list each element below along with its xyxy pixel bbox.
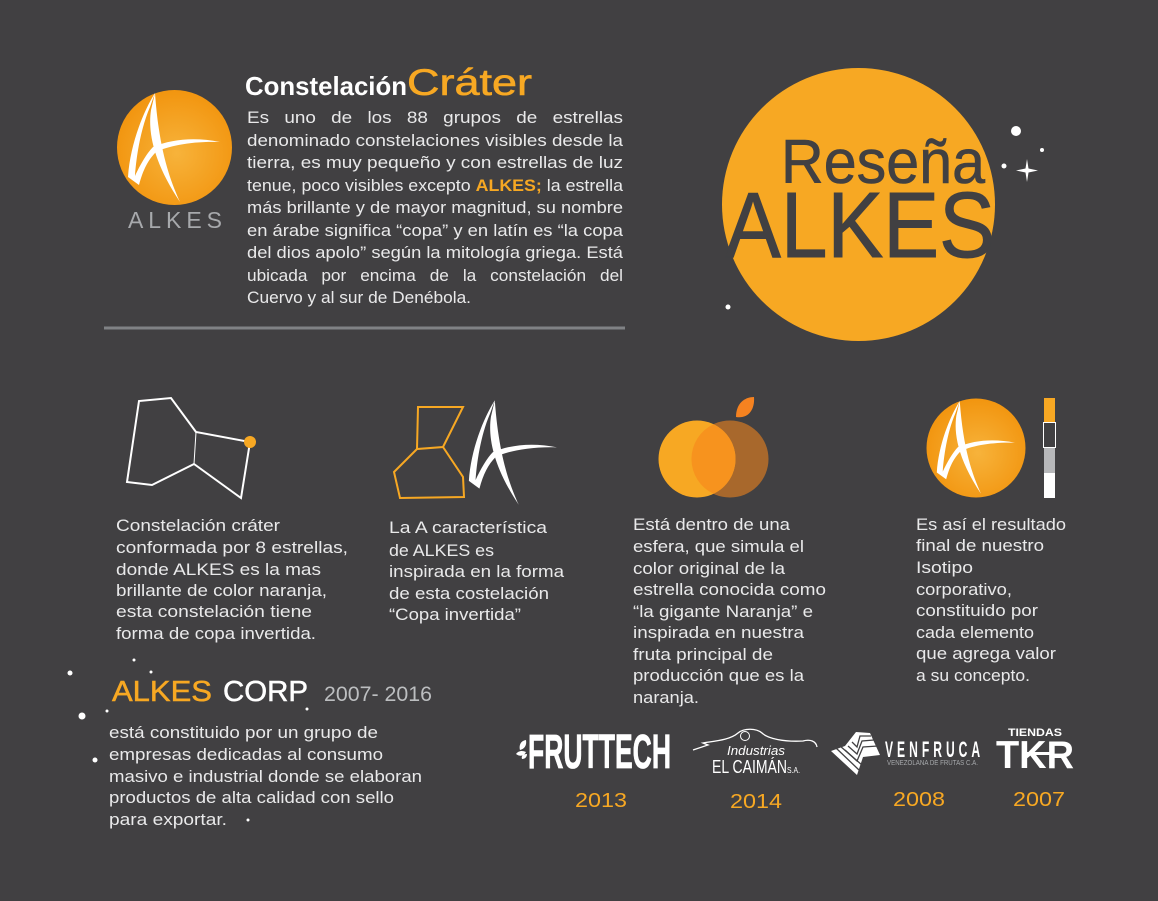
text block: constellation description: Constelación cráter — [116, 516, 280, 535]
text block: constellation description: conformada por 8 estrellas, — [116, 538, 348, 557]
text block: constellation description: donde ALKES es la mas — [116, 560, 321, 579]
text block: intro paragraph: en árabe significa “copa” y en latín es “la copa — [247, 221, 624, 240]
text block: intro paragraph: tenue, poco visibles excepto ALKES; la estrella — [247, 176, 624, 195]
text block: isotipo description: Isotipo — [916, 558, 973, 577]
title: Reseña ALKES on orange circle — [722, 68, 995, 341]
icon: final isotipo — [926, 398, 1026, 498]
icon: orange fruit circles — [658, 397, 768, 498]
text block: sphere description: fruta principal de — [633, 645, 773, 664]
text block: ALKES CORP description: empresas dedicadas al consumo — [109, 745, 383, 764]
text block: ALKES CORP description: masivo e industrial donde se elaboran — [109, 767, 422, 786]
logo: Venfruca 2008: VENFRUCA — [885, 737, 980, 762]
text block: intro paragraph: denominado constelaciones visibles desde la — [247, 131, 624, 150]
text block: ALKES CORP description: productos de alta calidad con sello — [109, 788, 394, 807]
text block: isotipo description: cada elemento — [916, 623, 1034, 642]
logo: ALKES isotipo — [117, 90, 232, 233]
text block: intro paragraph: Es uno de los 88 grupos de estrellas — [247, 108, 623, 127]
text block: constellation description: brillante de color naranja, — [116, 581, 327, 600]
text block: letter A description: La A característica — [389, 518, 548, 537]
text block: sphere description: producción que es la — [633, 666, 805, 685]
logo: Venfruca 2008: 2008 — [893, 789, 945, 811]
logo: Venfruca 2008: VENEZOLANA DE FRUTAS C.A. — [887, 760, 978, 767]
text block: letter A description: de ALKES es — [389, 541, 494, 560]
text block: isotipo description: que agrega valor — [916, 644, 1056, 663]
logo: Tiendas TKR 2007: TIENDAS — [1008, 727, 1062, 739]
heading: ALKES CORP 2007-2016: 2007- 2016 — [324, 683, 432, 706]
text block: isotipo description: corporativo, — [916, 580, 1012, 599]
text block: isotipo description: constituido por — [916, 601, 1038, 620]
logo: Industrias El Caimán 2014 — [693, 729, 817, 813]
text block: ALKES CORP description — [109, 723, 422, 829]
text block: constellation description: forma de copa invertida. — [116, 624, 316, 643]
text block: intro paragraph — [247, 108, 624, 307]
logo: Tiendas TKR 2007: 2007 — [1013, 789, 1065, 811]
heading: ALKES CORP 2007-2016: CORP — [223, 676, 308, 708]
logo: Venfruca 2008 — [831, 732, 980, 811]
logo: Industrias El Caimán 2014: EL CAIMÁN — [712, 757, 787, 777]
logo: Frutech 2013 — [516, 726, 671, 812]
text block: sphere description: estrella conocida como — [633, 580, 826, 599]
heading: ALKES CORP 2007-2016 — [112, 676, 432, 708]
title: Reseña ALKES on orange circle: ALKES — [725, 173, 995, 277]
text block: isotipo description — [916, 515, 1066, 685]
text block: isotipo description: a su concepto. — [916, 666, 1030, 685]
text block: sphere description: Está dentro de una — [633, 515, 791, 534]
text block: isotipo description: Es así el resultado — [916, 515, 1066, 534]
heading: Constelación Cráter: Constelación — [245, 71, 407, 101]
text block: letter A description: inspirada en la forma — [389, 562, 565, 581]
logo: Tiendas TKR 2007: TKR — [996, 734, 1074, 777]
heading: ALKES CORP 2007-2016: ALKES — [112, 676, 212, 708]
text block: isotipo description: final de nuestro — [916, 536, 1044, 555]
text block: intro paragraph: del dios apolo” según la mitología griega. Está — [247, 243, 624, 262]
logo: Industrias El Caimán 2014: 2014 — [730, 791, 782, 813]
text block: sphere description: color original de la — [633, 559, 786, 578]
text block: letter A description: “Copa invertida” — [389, 605, 521, 624]
text block: intro paragraph: Cuervo y al sur de Denébola. — [247, 288, 471, 307]
text block: intro paragraph: tierra, es muy pequeño y con estrellas de luz — [247, 153, 623, 172]
logo: Industrias El Caimán 2014: S.A. — [787, 766, 800, 775]
text block: sphere description: esfera, que simula el — [633, 537, 804, 556]
text block: ALKES CORP description: está constituido por un grupo de — [109, 723, 378, 742]
logo: Frutech 2013: 2013 — [575, 790, 627, 812]
logo: ALKES isotipo: ALKES — [128, 207, 222, 233]
text block: ALKES CORP description: para exportar. — [109, 810, 227, 829]
icon: constellation outline — [127, 398, 256, 498]
text block: sphere description: naranja. — [633, 688, 699, 707]
text block: sphere description — [633, 515, 826, 707]
text block: constellation description — [116, 516, 348, 643]
text block: letter A description — [389, 518, 565, 624]
colour palette bar — [1044, 398, 1056, 498]
text block: letter A description: de esta costelación — [389, 584, 549, 603]
title: Reseña ALKES on orange circle: Reseña — [781, 128, 985, 197]
text block: intro paragraph: más brillante y de mayor magnitud, su nombre — [247, 198, 623, 217]
logo: Industrias El Caimán 2014: Industrias — [727, 743, 785, 758]
text block: intro paragraph: ubicada por encima de la constelación del — [247, 266, 623, 285]
stars: top right — [726, 126, 1044, 310]
text block: sphere description: inspirada en nuestra — [633, 623, 805, 642]
stars: bottom left — [68, 658, 308, 822]
icon: cup constellation and letter A — [394, 400, 557, 505]
logo: Frutech 2013: FRUTTECH — [528, 726, 671, 779]
text block: constellation description: esta constelación tiene — [116, 602, 312, 621]
logo: Tiendas TKR 2007 — [996, 727, 1074, 811]
heading: Constelación Cráter: Cráter — [407, 62, 532, 103]
text block: sphere description: “la gigante Naranja” e — [633, 602, 813, 621]
heading: Constelación Cráter — [245, 62, 532, 103]
